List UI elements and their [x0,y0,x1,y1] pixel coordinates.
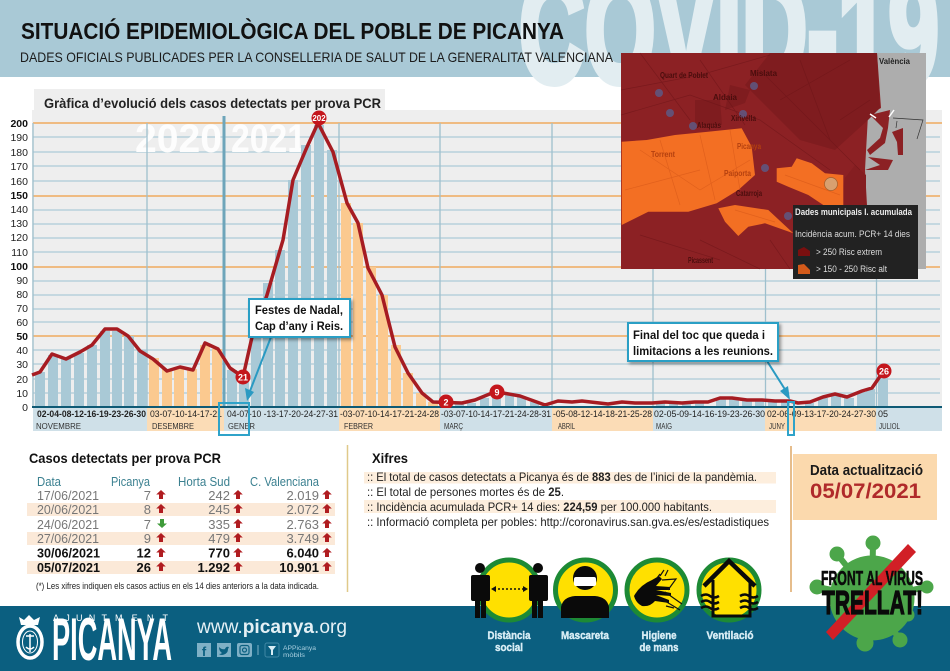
panel: update date: 05/07/2021 [810,480,921,503]
data point: 9 [490,384,504,400]
icon: instagram [237,643,252,657]
row 24/06: 24/06/2021 [37,517,99,532]
row 05/07: 10.901 [279,560,319,575]
place names: València [879,57,911,66]
x axis month bands and dates: 02-04-08-12-16-19-23-26-30 [37,409,146,420]
row 27/06: 479 [208,531,230,546]
callout: Nadal: Cap d’any i Reis. [255,321,343,333]
place names [651,57,911,265]
data point: 21 [236,370,250,384]
sea [865,53,926,269]
map legend: > 150 - 250 Risc alt [816,264,887,274]
x axis month bands and dates: JULIOL [879,421,900,431]
row 24/06: 2.763 [286,517,319,532]
column headers: Picanya [111,475,150,489]
icon labels: social [495,642,523,654]
row 17/06 [37,488,332,503]
x axis month bands and dates: JUNY [769,421,785,431]
row 20/06: 20/06/2021 [37,502,99,517]
row 30/06: 6.040 [286,546,319,560]
y axis labels: 30 [16,359,28,371]
orange reference lines [33,123,942,336]
icon: face mask [556,560,616,620]
panel: key figures [364,450,776,529]
row shading [27,503,335,574]
arrow: to June date [767,361,790,400]
virus shape [810,536,933,651]
text: PICANYA [52,606,172,671]
social icons: mòbils [283,652,306,659]
city dark area [745,53,880,150]
y axis labels: 140 [10,204,28,216]
y axis labels: 70 [16,303,28,315]
y axis labels: 60 [16,317,28,329]
y axis labels: 170 [10,161,28,173]
y axis labels: 150 [10,190,28,202]
icon: app [265,643,279,657]
orange zones [622,128,843,236]
chart heading: Gràfica d’evolució dels casos detectats per prova PCR [44,95,381,111]
x axis month bands and dates: -03-07-10-14-17-21-24-28-31 [441,409,551,420]
y axis labels: 10 [16,388,28,400]
x axis month bands and dates: ABRIL [558,421,575,431]
row 24/06: 7 [144,517,151,532]
data point: 26: 26 [879,366,889,376]
row 20/06: 2.072 [286,502,319,517]
table heading: Casos detectats per prova PCR [29,450,221,466]
y axis labels: 20 [16,374,28,386]
row 27/06 [37,531,332,546]
row 17/06: 2.019 [286,488,319,503]
x axis month bands and dates: -03-07-10-14-17-21-24-28 [340,409,439,420]
x axis month bands and dates: MARÇ [444,421,463,431]
icon labels: Mascareta [561,630,610,642]
year labels [135,117,306,161]
row 17/06: 242 [208,488,230,503]
row 27/06: 27/06/2021 [37,531,99,546]
icon labels: Higiene [642,630,676,642]
callout: final del toc de queda: limitacions a les reunions. [633,346,773,358]
x axis month bands and dates: 03-07-10-14-17-21 [150,409,222,420]
data point: 21: 21 [238,372,248,382]
y axis labels: 120 [10,232,28,244]
map legend: > 250 Risc extrem [816,247,882,257]
x axis month bands and dates: 05 [878,409,888,420]
row 05/07: 26 [137,560,151,575]
year labels: 2020 [135,117,222,161]
orange bars [149,203,438,407]
panel: update date: Data actualització [810,463,923,479]
icon labels: Ventilació [706,630,754,642]
icon labels: Distància [488,630,531,642]
row 30/06: 12 [137,546,151,560]
blue bars [35,125,888,407]
y axis labels: 80 [16,289,28,301]
slash [826,544,916,640]
row 30/06: 30/06/2021 [37,546,100,560]
row 27/06: 9 [144,531,151,546]
place names: Mislata [750,69,778,78]
place names: Alaquàs [697,121,721,130]
baseline [32,406,942,408]
y axis labels: 100 [10,261,28,273]
icon labels [488,630,754,654]
logo: Ajuntament Picanya: MENT [115,613,168,623]
data point: 2 [438,394,454,410]
column headers: C. Valenciana [250,475,319,489]
title: SITUACIÓ EPIDEMIOLÒGICA DEL POBLE DE PICANYA [21,17,564,44]
row 17/06: 7 [144,488,151,503]
column headers: Data [37,475,61,489]
y axis labels: 90 [16,275,28,287]
row 30/06 [37,546,332,560]
place names: Aldaia [713,93,738,102]
row 20/06: 8 [144,502,151,517]
subtitle: DADES OFICIALS PUBLICADES PER LA CONSELLERIA DE SALUT DE LA GENERALITAT VALENCIANA [20,49,614,65]
callout: final del toc de queda: Final del toc que queda i [633,330,765,342]
figure: total cases: :: El total de casos detectats a Picanya és de 883 des de l’inici de la pandèmia. [367,470,757,484]
y axis labels: 40 [16,345,28,357]
place names: Quart de Poblet [660,71,708,80]
logo: Ajuntament Picanya: AJUNT [53,613,108,623]
evolution line [32,123,883,405]
figure: incidence: :: Incidència acumulada PCR+ 14 dies: 224,59 per 100.000 habitants. [367,500,712,514]
row 24/06 [37,517,332,532]
x axis month bands and dates: DESEMBRE [152,421,194,431]
badge: front al virus [810,536,933,651]
place names: Picassent [688,256,713,265]
port outlines [870,110,923,139]
x axis month bands and dates: GENER [228,421,255,431]
row 05/07 [37,560,332,575]
x axis month bands and dates: MAIG [656,421,672,431]
map of accumulated incidence [621,53,926,279]
x axis month bands and dates: -05-08-12-14-18-21-25-28 [553,409,652,420]
row 17/06: 17/06/2021 [37,488,99,503]
figure: deaths: :: El total de persones mortes és de 25. [367,485,564,499]
y axis labels [10,118,28,414]
coat of arms [18,615,42,658]
row 30/06: 770 [208,546,230,560]
app label: APPicanya [283,645,316,652]
y axis labels: 200 [10,118,28,130]
footer band [0,606,950,671]
y axis labels: 50 [16,331,28,343]
callout: final del toc de queda [628,323,794,435]
data point: 202 [312,110,326,126]
callout: Nadal [219,299,350,435]
row 20/06: 245 [208,502,230,517]
row 24/06: 335 [208,517,230,532]
social icons [197,643,316,659]
icon: social distance [471,560,548,620]
website: www.picanya.org [196,617,347,638]
y axis labels: 110 [11,247,28,259]
x axis month bands and dates: 02-06-09-13-17-20-24-27-30 [767,409,876,420]
x axis month bands and dates: 02-05-09-14-16-19-23-26-30 [654,409,765,420]
y axis labels: 0 [22,402,28,414]
data point: 9: 9 [494,388,500,398]
figures heading: Xifres [372,450,408,466]
x axis month bands and dates: FEBRER [344,421,373,431]
row 05/07: 1.292 [197,560,230,575]
arrow: to Christmas dates [245,337,271,401]
x axis month bands and dates [33,408,942,431]
data point: 202: 202 [312,114,326,123]
x axis month bands and dates: NOVEMBRE [36,421,81,431]
y axis labels: 190 [10,132,28,144]
icon: twitter [217,643,231,657]
x axis month bands and dates: 04-07-10 -13-17-20-24-27-31 [227,409,338,420]
month separators [33,123,876,407]
row 27/06: 3.749 [286,531,319,546]
data point: 26 [876,364,892,378]
map legend: Incidència acum. PCR+ 14 dies [795,229,910,239]
map legend [793,205,918,279]
figure: more information: :: Informació completa per pobles: http://coronavirus.san.gva.es/es/estadistiques [367,515,769,529]
callout: Nadal: Festes de Nadal, [255,305,343,317]
place names: Torrent [651,150,675,159]
town markers [655,82,792,220]
icon: hand hygiene [627,560,687,620]
line and bar chart [32,110,942,410]
icon: ventilation [699,560,759,620]
place names: Paiporta [724,169,751,178]
y axis labels: 160 [10,176,28,188]
chart heading [34,89,385,111]
place names: Catarroja [736,189,762,198]
place names: Xirivella [731,114,756,123]
year labels: 2021 [231,117,306,161]
y axis labels: 130 [10,218,28,230]
header band [0,0,950,114]
column headers [37,475,319,489]
icon: facebook: f [202,644,207,659]
panel: cases table [27,450,335,592]
data point: 2: 2 [443,398,449,408]
footnote: (*) Les xifres indiquen els casos actius en els 14 dies anteriors a la data indicada. [36,581,319,592]
column headers: Horta Sud [178,475,230,489]
place names: Picanya [737,142,761,151]
panel: update date [793,454,937,520]
icon labels: de mans [640,642,678,654]
logo: Ajuntament Picanya [18,606,172,671]
horizontal grid [33,137,940,393]
row 05/07: 05/07/2021 [37,560,100,575]
y axis labels: 180 [10,147,28,159]
row 20/06 [37,502,332,517]
map legend: Dades municipals I. acumulada [795,207,913,217]
port docks [865,110,903,170]
road texture [621,53,870,269]
